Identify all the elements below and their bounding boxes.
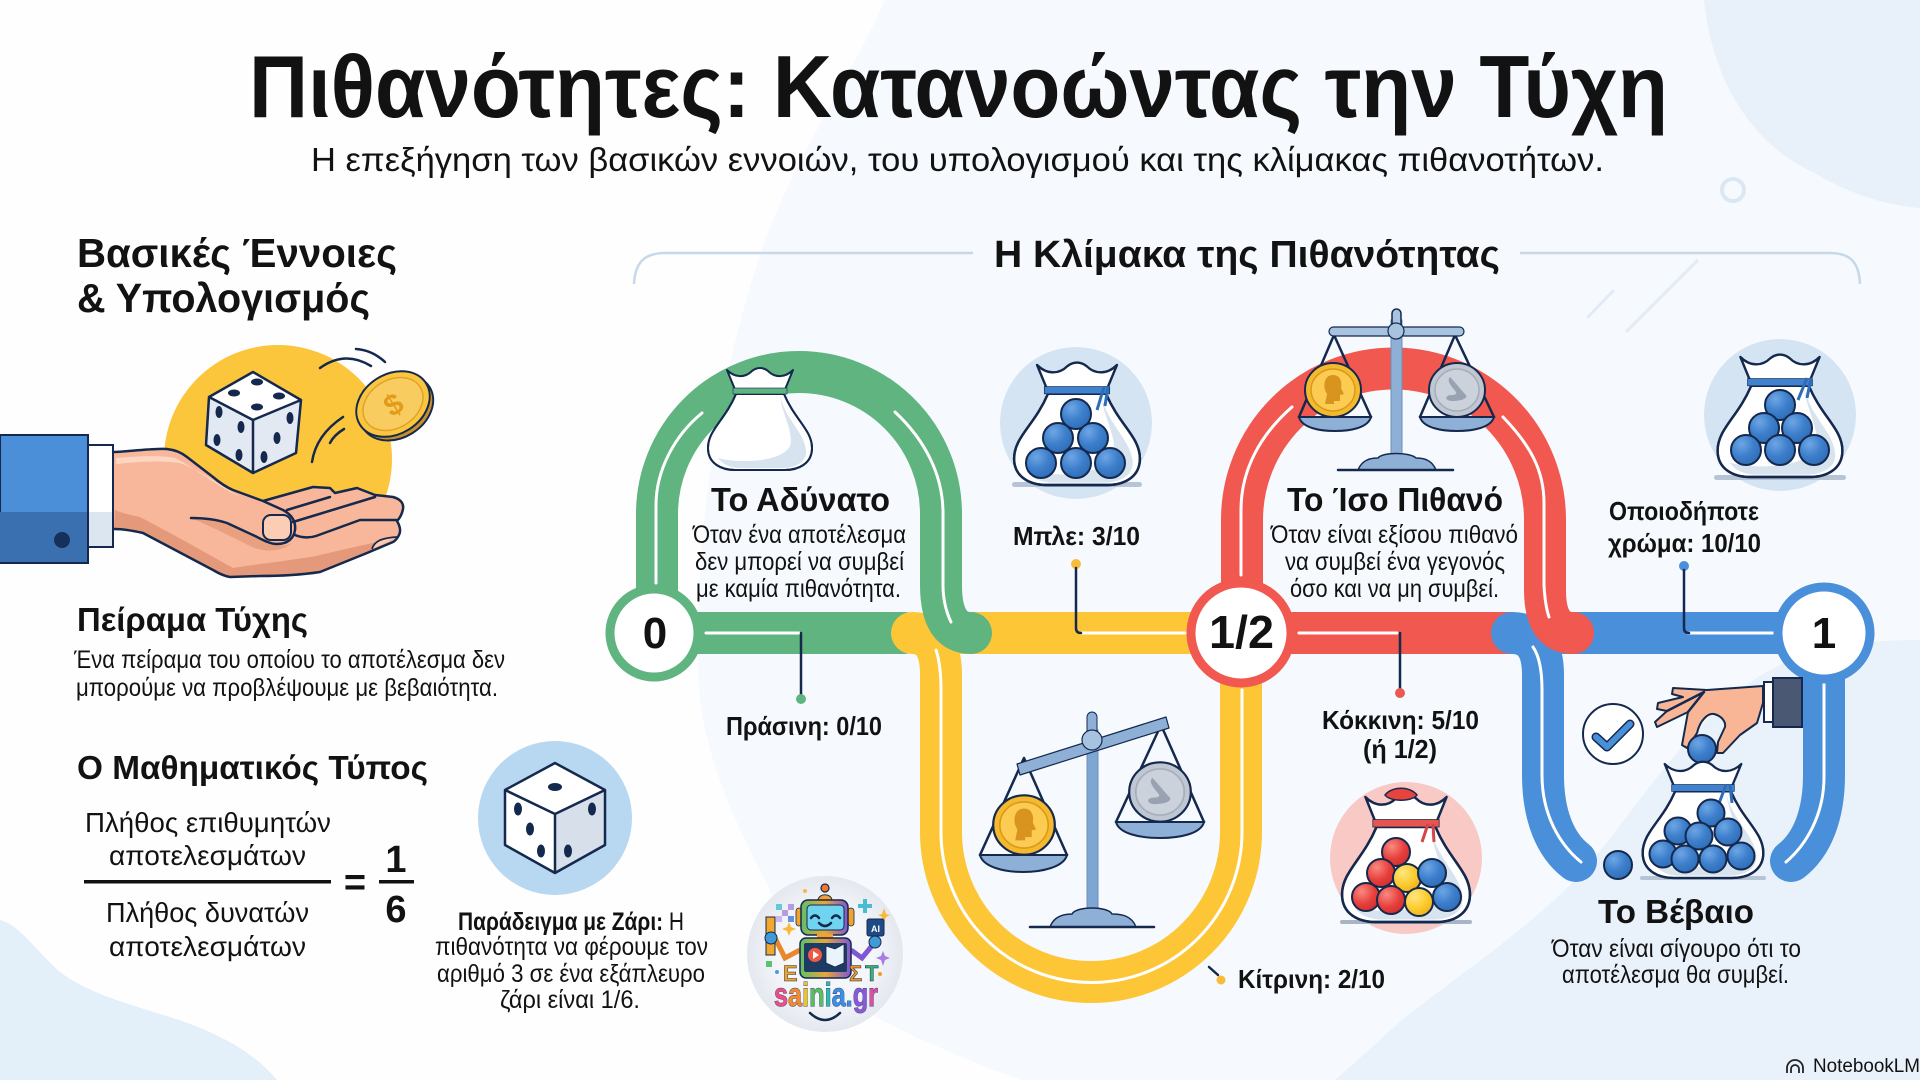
logo: sainia.gr robot [747, 876, 903, 1032]
icon: bag with mixed balls [1330, 782, 1482, 934]
track: red horizontal [1241, 612, 1510, 654]
icon: bag with blue balls [1000, 347, 1152, 499]
heading: chance experiment: Πείραμα Τύχης [77, 601, 308, 638]
leader: red label [1395, 633, 1405, 698]
marker: 1 [1778, 587, 1870, 679]
panel: equally likely: Όταν είναι εξίσου πιθανό [1270, 521, 1518, 549]
formula: favourable over possible outcomes equals one sixth [84, 807, 414, 962]
marker: 1/2 [1191, 583, 1291, 683]
watermark: NotebookLM: NotebookLM [1813, 1056, 1920, 1077]
text: dice example [435, 908, 708, 1014]
label: any colour 10/10: χρώμα: 10/10 [1608, 528, 1761, 558]
formula: favourable over possible outcomes equals one sixth: 6 [385, 889, 407, 931]
icon: bag with blue balls (certain) [1704, 339, 1856, 491]
text: chance experiment definition: μπορούμε να προβλέψουμε με βεβαιότητα. [76, 674, 498, 702]
text: dice example: ζάρι είναι 1/6. [500, 986, 640, 1014]
logo: sainia.gr robot: AI [871, 924, 880, 934]
panel: impossible: με καμία πιθανότητα. [696, 575, 901, 603]
heading: basic concepts and calculation: & Υπολογισμός [77, 275, 370, 321]
formula: favourable over possible outcomes equals one sixth: αποτελεσμάτων [109, 840, 306, 871]
panel: impossible: Όταν ένα αποτέλεσμα [692, 521, 906, 549]
label: red 5/10 [1322, 705, 1479, 764]
text: dice example: Παράδειγμα με Ζάρι: Η [458, 908, 684, 936]
icon: hand tossing die and coin: $ [378, 387, 410, 424]
label: blue 3/10: Μπλε: 3/10 [1013, 521, 1140, 551]
subtitle: Η επεξήγηση των βασικών εννοιών, του υπολογισμού και της κλίμακας πιθανοτήτων. [311, 141, 1604, 178]
track: yellow U-curve [912, 633, 1241, 982]
icon: hand dropping ball into full bag [1640, 678, 1802, 880]
icon: loose blue ball [1604, 851, 1632, 879]
leader: green label [796, 633, 806, 704]
heading: probability scale [634, 234, 1860, 284]
formula: favourable over possible outcomes equals one sixth: αποτελεσμάτων [109, 931, 306, 962]
icon: check mark [1583, 704, 1643, 764]
label: any colour 10/10 [1608, 496, 1761, 558]
panel: certain [1551, 893, 1801, 989]
track: green arch [657, 372, 971, 633]
text: chance experiment definition [73, 646, 505, 702]
label: green 0/10: Πράσινη: 0/10 [726, 711, 882, 741]
title: Πιθανότητες: Κατανοώντας την Τύχη [249, 37, 1668, 136]
panel: equally likely [1270, 481, 1518, 603]
logo: sainia.gr robot: Σ [849, 961, 862, 986]
text: dice example: αριθμό 3 σε ένα εξάπλευρο [437, 960, 705, 988]
formula: favourable over possible outcomes equals one sixth: Πλήθος επιθυμητών [85, 807, 331, 838]
panel: certain: Όταν είναι σίγουρο ότι το [1551, 935, 1801, 963]
logo: sainia.gr robot: Τ [865, 961, 879, 986]
heading: basic concepts and calculation: Βασικές Έννοιες [77, 230, 397, 276]
label: yellow 2/10: Κίτρινη: 2/10 [1238, 964, 1385, 994]
panel: certain: Το Βέβαιο [1598, 893, 1754, 930]
panel: equally likely: Το Ίσο Πιθανό [1287, 481, 1503, 518]
logo: sainia.gr robot: sainia.gr [774, 976, 878, 1013]
panel: certain: αποτέλεσμα θα συμβεί. [1562, 961, 1789, 989]
track: blue horizontal [1560, 612, 1824, 654]
formula: favourable over possible outcomes equals one sixth: = [344, 862, 366, 904]
track: red arch [1242, 368, 1573, 633]
panel: equally likely: να συμβεί ένα γεγονός [1285, 548, 1505, 576]
icon: empty bag [708, 368, 812, 470]
track: blue right descent [1791, 633, 1824, 861]
text: chance experiment definition: Ένα πείραμα του οποίου το αποτέλεσμα δεν [73, 646, 505, 674]
icon: hand tossing die and coin [0, 345, 445, 577]
leader: yellow label [1209, 967, 1226, 984]
chart: probability scale track [654, 368, 1824, 982]
heading: basic concepts and calculation [77, 230, 397, 321]
track: yellow horizontal [960, 612, 1241, 654]
label: red 5/10: Κόκκινη: 5/10 [1322, 705, 1479, 735]
leader: blue label [1071, 559, 1081, 633]
label: any colour 10/10: Οποιοδήποτε [1609, 496, 1759, 526]
icon: tilted scale with coins [980, 712, 1204, 927]
heading: mathematical formula: Ο Μαθηματικός Τύπος [77, 749, 428, 786]
panel: equally likely: όσο και να μη συμβεί. [1290, 575, 1499, 603]
panel: impossible: Το Αδύνατο [711, 481, 890, 518]
panel: impossible [692, 481, 906, 603]
text: dice example: πιθανότητα να φέρουμε τον [435, 933, 708, 961]
icon: die on blue circle [478, 741, 632, 895]
marker: 0 [610, 589, 698, 677]
icon: balanced scale with coins [1299, 309, 1494, 470]
marker: 1: 1 [1812, 609, 1836, 658]
leader: any colour label [1679, 561, 1689, 633]
track: blue left descent [1512, 633, 1576, 861]
heading: probability scale: Η Κλίμακα της Πιθανότητας [994, 234, 1500, 276]
track: green horizontal [654, 612, 905, 654]
panel: impossible: δεν μπορεί να συμβεί [695, 548, 904, 576]
marker: 1/2: 1/2 [1209, 606, 1274, 658]
marker: 0: 0 [643, 609, 667, 658]
logo: sainia.gr robot: Ε [783, 961, 798, 986]
formula: favourable over possible outcomes equals one sixth: Πλήθος δυνατών [106, 897, 309, 928]
formula: favourable over possible outcomes equals one sixth: 1 [385, 839, 407, 881]
label: red 5/10: (ή 1/2) [1363, 734, 1437, 764]
